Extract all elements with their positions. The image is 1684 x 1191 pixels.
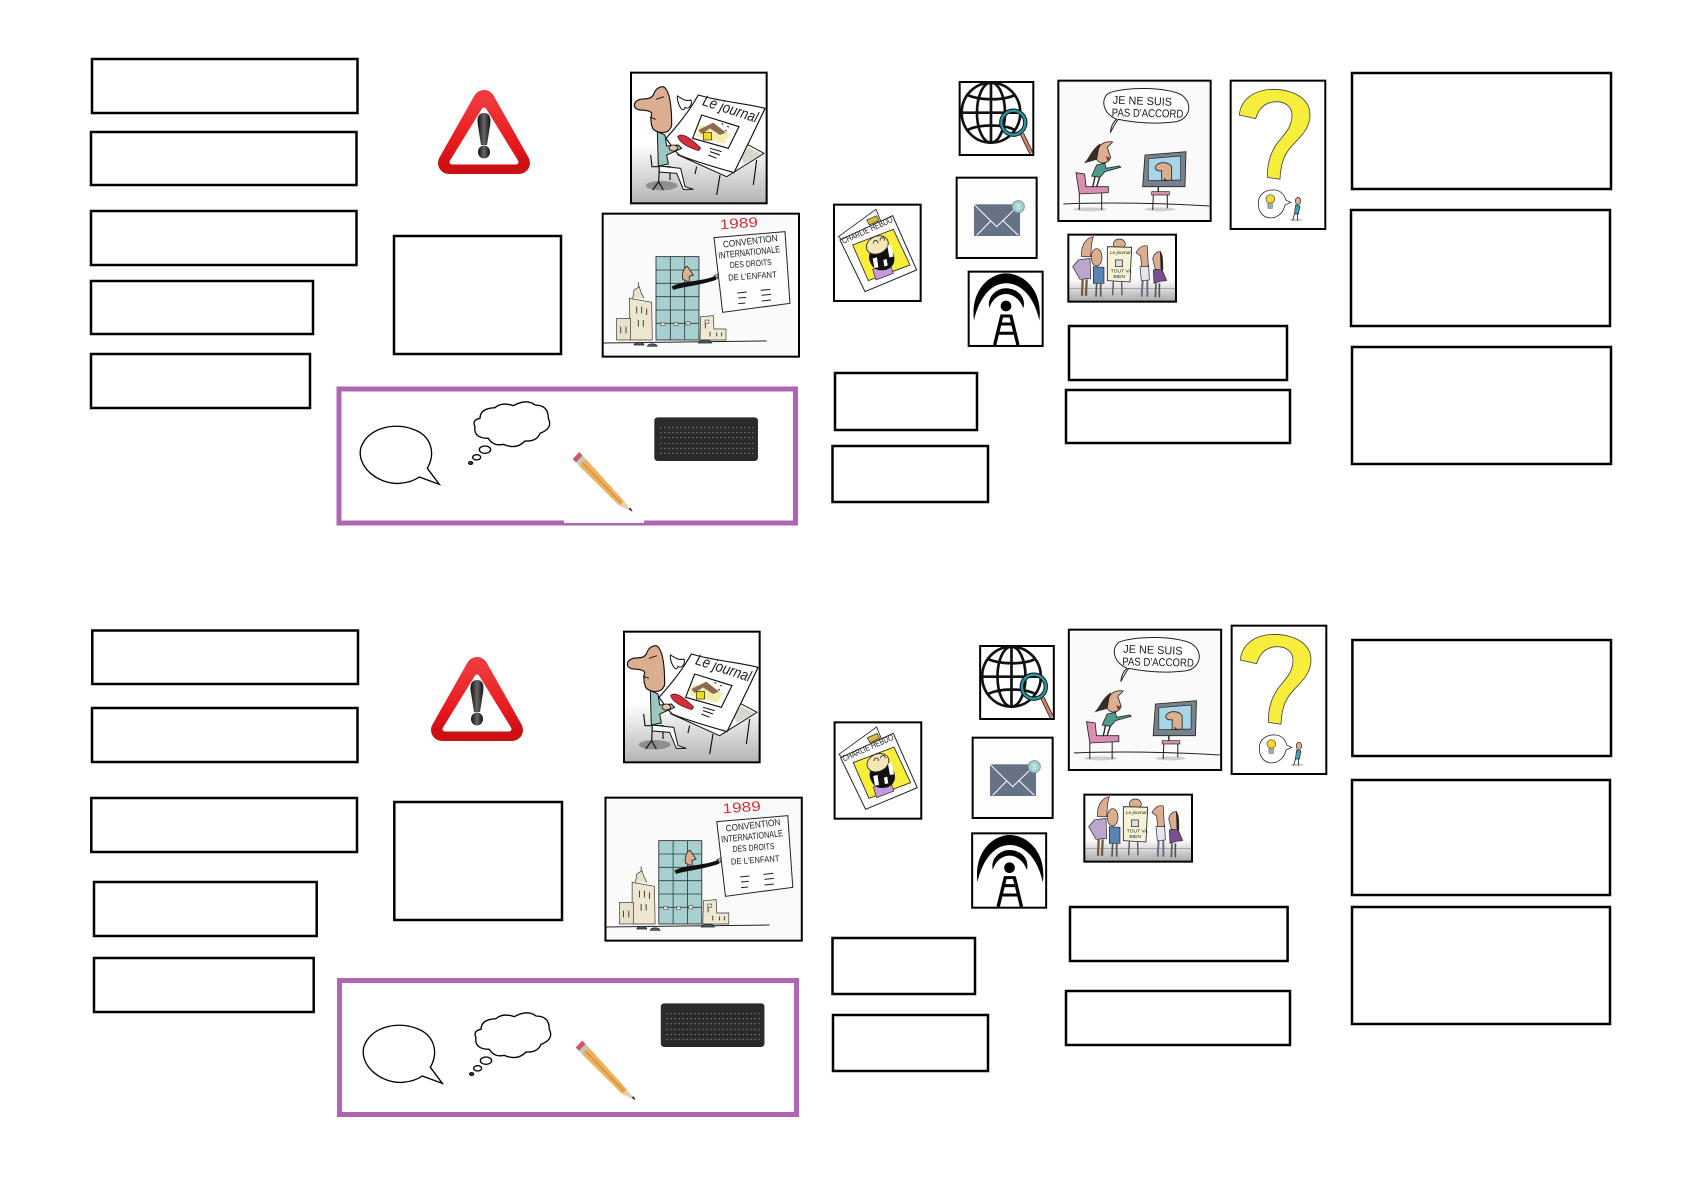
illustration: convention 1989 bbox=[605, 798, 802, 941]
illustration: question mark bbox=[1231, 81, 1325, 229]
panel: expression tools bbox=[339, 389, 796, 523]
illustration: people with newspaper: BIEN bbox=[1129, 834, 1141, 840]
illustration: je ne suis pas d'accord: JE NE SUIS bbox=[1123, 644, 1183, 658]
illustration: je ne suis pas d'accord bbox=[1058, 81, 1211, 221]
illustration: le journal: Le journal bbox=[700, 93, 761, 127]
illustration: people with newspaper: BIEN bbox=[1113, 274, 1125, 280]
icon: broadcast tower bbox=[969, 272, 1043, 346]
answer box right 2 bbox=[1352, 780, 1610, 895]
answer box 6 bbox=[1069, 326, 1287, 380]
illustration: je ne suis pas d'accord: PAS D'ACCORD bbox=[1122, 656, 1194, 670]
icon: speech bubble bbox=[360, 426, 439, 484]
illustration: je ne suis pas d'accord bbox=[1069, 630, 1221, 770]
panel: top worksheet bbox=[91, 59, 1611, 523]
icon: speech bubble bbox=[363, 1025, 442, 1083]
purple frame bbox=[339, 389, 796, 523]
answer box 2 bbox=[92, 708, 358, 762]
illustration: people with newspaper bbox=[1084, 795, 1192, 862]
answer box centre bbox=[394, 802, 562, 920]
answer box 1 bbox=[92, 630, 358, 684]
icon: globe search bbox=[960, 82, 1033, 155]
panel: bottom worksheet bbox=[91, 626, 1611, 1114]
illustration: newspaper charlie hebdo bbox=[834, 205, 921, 301]
illustration: question mark bbox=[1232, 626, 1326, 774]
illustration: convention 1989 bbox=[603, 214, 799, 357]
illustration: people with newspaper bbox=[1068, 235, 1176, 302]
answer box right 2 bbox=[1351, 210, 1610, 326]
icon: mail bbox=[957, 178, 1037, 258]
illustration: le journal bbox=[624, 632, 760, 762]
icon: mail: 5 bbox=[1016, 204, 1020, 211]
icon: thought cloud bbox=[469, 1013, 551, 1076]
answer box 8 bbox=[835, 373, 977, 430]
illustration: people with newspaper: TOUT VA bbox=[1127, 829, 1148, 835]
purple frame bbox=[340, 980, 796, 1114]
icon: pencil bbox=[576, 1040, 636, 1100]
icon: mail bbox=[973, 738, 1053, 818]
illustration: people with newspaper: Le journal bbox=[1110, 250, 1131, 255]
answer box right 1 bbox=[1352, 640, 1611, 756]
illustration: newspaper charlie hebdo: CHARLIE HEBDO bbox=[840, 214, 895, 246]
illustration: convention 1989: DES DROITS bbox=[732, 841, 775, 854]
answer box 2 bbox=[91, 132, 356, 185]
icon: warning triangle bbox=[449, 101, 519, 163]
panel: expression tools bbox=[340, 980, 796, 1114]
answer box right 3 bbox=[1352, 907, 1610, 1024]
answer box 4 bbox=[94, 882, 317, 936]
answer box 7 bbox=[1066, 390, 1290, 443]
illustration: convention 1989: DE L'ENFANT bbox=[728, 269, 778, 283]
answer box 4 bbox=[91, 281, 313, 334]
illustration: convention 1989: 1989 bbox=[722, 798, 761, 816]
answer box 5 bbox=[94, 958, 314, 1012]
answer box centre bbox=[394, 236, 561, 354]
answer box right 1 bbox=[1352, 73, 1611, 189]
answer box 7 bbox=[1066, 991, 1290, 1045]
answer box 9 bbox=[833, 1015, 988, 1071]
icon: pencil bbox=[573, 452, 633, 512]
answer box 3 bbox=[91, 211, 356, 265]
illustration: le journal bbox=[631, 73, 767, 203]
illustration: newspaper charlie hebdo: CHARLIE HEBDO bbox=[841, 732, 895, 764]
icon: thought cloud bbox=[468, 402, 550, 465]
answer box right 3 bbox=[1352, 347, 1611, 464]
illustration: le journal: Le journal bbox=[693, 652, 754, 686]
illustration: je ne suis pas d'accord: PAS D'ACCORD bbox=[1112, 107, 1183, 121]
illustration: convention 1989: INTERNATIONALE bbox=[718, 244, 781, 261]
illustration: newspaper charlie hebdo bbox=[835, 722, 921, 819]
icon: warning triangle bbox=[442, 668, 512, 730]
illustration: people with newspaper: TOUT VA bbox=[1111, 269, 1132, 275]
icon: broadcast tower bbox=[972, 833, 1046, 908]
icon: globe search bbox=[980, 646, 1054, 719]
illustration: convention 1989: 1989 bbox=[719, 214, 759, 232]
illustration: convention 1989: CONVENTION bbox=[725, 817, 781, 834]
icon: keyboard bbox=[661, 1003, 764, 1047]
answer box 1 bbox=[92, 59, 358, 113]
answer box 9 bbox=[832, 446, 988, 502]
illustration: convention 1989: CONVENTION bbox=[722, 233, 778, 250]
icon: mail: 5 bbox=[1032, 764, 1036, 771]
icon: keyboard bbox=[654, 417, 758, 461]
illustration: je ne suis pas d'accord: JE NE SUIS bbox=[1113, 95, 1173, 109]
answer box 6 bbox=[1070, 907, 1288, 961]
answer box 3 bbox=[91, 798, 357, 852]
illustration: convention 1989: DES DROITS bbox=[729, 257, 772, 270]
illustration: people with newspaper: Le journal bbox=[1126, 810, 1147, 815]
answer box 5 bbox=[91, 354, 310, 408]
answer box 8 bbox=[832, 938, 975, 994]
illustration: convention 1989: DE L'ENFANT bbox=[731, 853, 780, 867]
illustration: convention 1989: INTERNATIONALE bbox=[721, 828, 783, 845]
